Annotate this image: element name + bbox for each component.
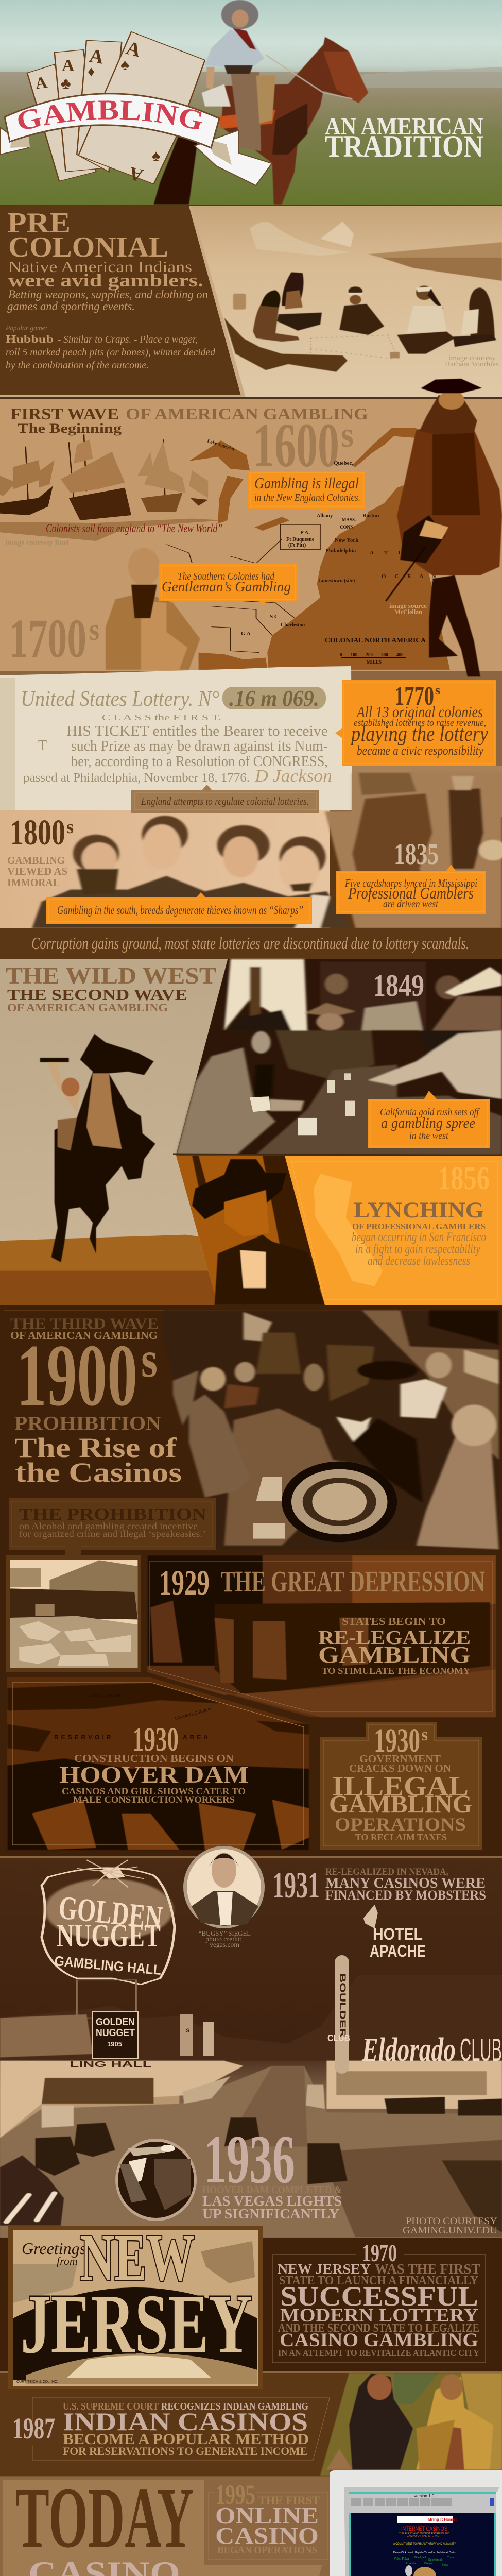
text: native americans: Hubbub <box>6 333 54 345</box>
box: 1930s illegal gambling: TO RECLAIM TAXES <box>355 1832 447 1842</box>
panel: third wave <box>0 1305 502 1856</box>
callout: 1770s lotteries: established lotteries to raise revenue, <box>354 718 486 728</box>
panel: lottery ticket: D Jackson <box>254 767 332 786</box>
photo: crt monitor showing internet casino: CASINO ON THE INTERNET! <box>407 2535 441 2538</box>
map labels: Charleston <box>281 622 305 628</box>
panel: great depression: GAMBLING <box>318 1641 471 1668</box>
box: the prohibition: on Alcohol and gambling created incentive <box>19 1521 198 1531</box>
photo: greetings from new jersey postcard: Greetings <box>22 2239 86 2258</box>
neon signs: APACHE <box>370 1942 426 1960</box>
neon signs: Eldorado <box>361 2031 456 2069</box>
box: 1930s illegal gambling: s <box>421 1725 428 1744</box>
callout: gambling illegal: Gambling is illegal <box>254 474 359 492</box>
neon signs: BOULDER <box>338 1973 348 2038</box>
photo: crt monitor showing internet casino: Blackjack <box>414 2556 427 2560</box>
photo: crt monitor showing internet casino: Video Poker <box>394 2557 409 2561</box>
text: gambling viewed as immoral: GAMBLING <box>7 854 65 867</box>
panel: lottery ticket: T <box>38 738 47 754</box>
panel: hoover dam: HOOVER DAM <box>59 1761 249 1788</box>
photo: crt monitor showing internet casino: Bingo <box>424 2562 432 2565</box>
image credit: image source <box>389 602 427 609</box>
heading: wild west: THE WILD WEST <box>6 963 216 989</box>
callout: sharps: Gambling in the south, breeds degenerate thieves known as “Sharps” <box>57 904 303 917</box>
caption: bugsy siegel <box>199 1930 251 1949</box>
photo: crt monitor showing internet casino: Bring it Home! <box>428 2517 457 2522</box>
text: native americans: were avid gamblers. <box>8 270 203 291</box>
year: 1700s: s <box>89 613 99 647</box>
map labels: Boston <box>362 513 379 519</box>
box: 1930s illegal gambling: GOVERNMENT <box>359 1753 441 1765</box>
box: 1930s illegal gambling: 1930 <box>374 1722 420 1759</box>
heading: wild west <box>6 963 216 1014</box>
heading: first wave: OF AMERICAN GAMBLING <box>126 404 368 423</box>
map labels: P A. <box>300 530 310 536</box>
map labels: Quebec, <box>334 460 353 466</box>
heading: first wave <box>10 404 368 436</box>
photo: rearing horse and rider <box>0 1034 218 1305</box>
panel: lottery ticket: United States Lottery. N° <box>21 687 219 711</box>
panel: 1856 lynching: LYNCHING <box>354 1198 484 1223</box>
panel: hoover dam: MALE CONSTRUCTION WORKERS <box>73 1794 235 1805</box>
title: an american tradition: TRADITION <box>325 129 483 163</box>
map: colonial north america <box>166 428 450 670</box>
panel: las vegas <box>0 1846 502 2238</box>
panel: hoover dam: CONSTRUCTION BEGINS ON <box>74 1752 234 1765</box>
photo: crt monitor showing internet casino: THE FIRST AND OLDEST ESTABLISHED <box>399 2532 449 2535</box>
image credit: Barbara Voorhies <box>445 361 499 368</box>
ribbon banner with title <box>0 93 273 187</box>
panel: lottery ticket: passed at Philadelphia, November 18, 1776. <box>23 771 250 785</box>
panel: 1987 background <box>0 2371 502 2477</box>
callout: gambling illegal: in the New England Colonies. <box>254 492 360 503</box>
photo: bread line <box>147 1555 496 1717</box>
divider <box>0 205 502 206</box>
box: 1995 online casino: ONLINE <box>215 2502 319 2529</box>
heading: pre colonial <box>7 207 168 263</box>
panel: hero: A <box>88 45 105 69</box>
map labels <box>206 438 440 665</box>
box: 1995 online casino <box>209 2479 327 2560</box>
text: gambling viewed as immoral: VIEWED AS <box>7 865 67 877</box>
panel: 1987 indian casinos: BECOME A POPULAR METHOD <box>63 2431 309 2448</box>
panel: today <box>0 2470 502 2576</box>
panel: lottery ticket: .16 m 069. <box>229 686 319 711</box>
text: gambling viewed as immoral <box>7 854 67 889</box>
map labels: G A <box>241 631 251 637</box>
year: 1835: 1835 <box>394 837 439 871</box>
sign: golden nugget: GAMBLING HALL <box>54 1953 162 1978</box>
box: 1930s illegal gambling <box>320 1722 482 1850</box>
callout: gentleman's gambling <box>159 563 298 606</box>
photo: native americans playing hubbub <box>224 222 502 372</box>
neon signs: 1905 <box>107 2040 122 2048</box>
photo: gunfight engraving <box>325 773 502 928</box>
panel: great depression: RE-LEGALIZE <box>318 1627 471 1649</box>
text: native americans: Popular game: <box>5 325 47 332</box>
caption: bugsy siegel: photo credit: <box>205 1936 242 1943</box>
panel: 1970 new jersey: IN AN ATTEMPT TO REVITALIZE ATLANTIC CITY <box>278 2348 479 2358</box>
photo: man in colonial coat <box>386 379 502 676</box>
panel: 1970 new jersey: CASINO GAMBLING <box>280 2330 478 2351</box>
text: 1931 <box>272 1865 486 1906</box>
heading: pre colonial: PRE <box>7 207 71 239</box>
heading: first wave: FIRST WAVE <box>10 404 119 423</box>
text: 1936: LAS VEGAS LIGHTS <box>202 2193 342 2209</box>
photo: crt monitor showing internet casino: Slots <box>442 2564 448 2567</box>
map labels: New York <box>335 537 359 544</box>
callout: gold rush <box>368 1091 490 1148</box>
panel: pre colonial <box>0 206 502 399</box>
panel: hero: A <box>127 163 145 186</box>
panel: 1987 indian casinos <box>12 2373 502 2476</box>
text: native americans <box>5 258 216 371</box>
photo: greetings from new jersey postcard: JERSEY <box>21 2277 252 2371</box>
text: 1931: FINANCED BY MOBSTERS <box>325 1888 486 1903</box>
neon signs: LING HALL <box>70 2060 152 2069</box>
callout: professional gamblers: Professional Gamblers <box>348 884 474 902</box>
callout: 1770s lotteries: s <box>435 683 440 698</box>
panel: hero: ♠ <box>120 55 129 74</box>
box: the prohibition: THE PROHIBITION <box>19 1505 207 1524</box>
panel: 1970 new jersey: STATE TO LAUNCH A FINANCIALLY <box>279 2274 478 2287</box>
banner: corruption <box>0 928 502 959</box>
image credit: PHOTO COURTESY <box>406 2216 497 2227</box>
photo: crt monitor showing internet casino: INTERNET CASINOS <box>401 2525 447 2532</box>
title: an american tradition: AN AMERICAN <box>325 113 483 140</box>
map labels: S C <box>270 614 279 620</box>
photo: hoover dam oval <box>115 2139 197 2221</box>
image credit: image courtesy <box>448 354 496 362</box>
neon signs: S <box>186 2028 189 2034</box>
panel: great depression: TO STIMULATE THE ECONOMY <box>322 1666 470 1676</box>
panel: 1856 lynching: and decrease lawlessness <box>368 1254 470 1268</box>
panel: lottery ticket: such Prize as may be drawn against its Num- <box>71 738 328 754</box>
panel: hero: A <box>62 56 75 75</box>
year: 1600s: 1600 <box>253 411 339 480</box>
panel: hoover dam: COLORADO RIVER <box>174 1707 212 1721</box>
neon signs: GOLDEN <box>96 2016 135 2028</box>
icon: california map <box>314 1174 383 1286</box>
photo: crt monitor showing internet casino: Sportsbook <box>428 2558 442 2562</box>
caption: bugsy siegel: “BUGSY” SIEGEL <box>199 1930 251 1938</box>
image credit: GAMING.UNIV.EDU <box>403 2225 497 2236</box>
callout: 1770s lotteries: became a civic responsibility <box>357 744 484 758</box>
neon signs: CLUB <box>327 2033 350 2043</box>
callout: gambling illegal <box>248 471 366 514</box>
callout: gold rush: California gold rush sets off <box>380 1107 480 1118</box>
box: 1995 online casino: 1995 <box>215 2479 255 2510</box>
year: 1800s: 1800 <box>10 813 65 853</box>
panel: 1970 new jersey <box>0 2237 502 2371</box>
panel: 1970 new jersey: MODERN LOTTERY <box>280 2305 478 2326</box>
panel: 1987 indian casinos: FOR RESERVATIONS TO GENERATE INCOME <box>63 2445 307 2458</box>
panel: 1856 lynching <box>285 1156 502 1305</box>
panel: 1987 indian casinos: RECOGNIZES INDIAN GAMBLING <box>161 2401 308 2412</box>
panel: 1970 new jersey: AND THE SECOND STATE TO LEGALIZE <box>278 2321 479 2334</box>
panel: hoover dam: AREA <box>183 1734 211 1741</box>
box: 1930s illegal gambling: GAMBLING <box>329 1789 472 1818</box>
caption: bugsy siegel: vegas.com <box>210 1941 239 1949</box>
heading: pre colonial: COLONIAL <box>8 231 168 263</box>
text: native americans: Betting weapons, supplies, and clothing on <box>8 288 208 301</box>
box: the prohibition: for organized crime and illegal ‘speakeasies.’ <box>19 1529 206 1539</box>
photo: crt monitor showing internet casino: Craps <box>447 2556 455 2560</box>
text: native americans: by the combination of the outcome. <box>6 360 149 371</box>
photo: roulette table <box>164 1310 499 1549</box>
photo: greetings from new jersey postcard: from <box>57 2255 78 2267</box>
neon signs: NUGGET <box>96 2027 135 2039</box>
text: 1931: MANY CASINOS WERE <box>325 1875 486 1891</box>
callout: gold rush: a gambling spree <box>381 1115 475 1131</box>
panel: 1987 indian casinos: 1987 <box>12 2412 55 2445</box>
panel: hero: ♠ <box>152 147 160 164</box>
image credit <box>445 354 499 368</box>
panel: hoover dam: GRAND CANYON <box>89 1693 123 1698</box>
callout: sharps <box>46 892 312 924</box>
photo: greetings from new jersey postcard <box>8 2221 263 2389</box>
panel: 1970 new jersey: 1970 <box>362 2240 397 2267</box>
text: 1931: 1931 <box>272 1865 320 1906</box>
year: 1600s: s <box>341 415 354 455</box>
panel: 1987 indian casinos: U.S. SUPREME COURT <box>63 2401 159 2412</box>
heading: wild west: OF AMERICAN GAMBLING <box>7 1001 168 1014</box>
image credit <box>389 602 427 616</box>
year: 1800s: s <box>66 817 74 837</box>
callout: england attempts: England attempts to regulate colonial lotteries. <box>141 795 309 807</box>
text: native americans: games and sporting events. <box>7 300 135 313</box>
callout: professional gamblers <box>336 865 486 914</box>
photo: gambling hall <box>176 959 502 1155</box>
panel: hero: A <box>34 73 48 93</box>
text: native americans: - Similar to Craps. - Place a wager, <box>58 334 198 345</box>
panel: hero: ♦ <box>88 64 95 80</box>
panel: lottery ticket <box>0 666 502 817</box>
panel: 1970 new jersey: SUCCESSFUL <box>280 2281 478 2312</box>
icon: four aces playing cards <box>27 32 205 184</box>
panel: lottery ticket: HIS TICKET entitles the Bearer to receive <box>66 723 328 739</box>
callout: gentleman's gambling: The Southern Colonies had <box>178 571 275 582</box>
box: 1930s illegal gambling: CRACKS DOWN ON <box>349 1762 451 1774</box>
panel: hoover dam <box>7 1677 309 1850</box>
map labels: Lake Superior <box>206 438 236 452</box>
map labels: Jamestown (site) <box>318 578 355 584</box>
heading: third wave: 1900 <box>16 1327 137 1425</box>
panel: great depression: 1929 <box>159 1563 210 1602</box>
photo: crt monitor showing internet casino: A COMMITMENT TO PHILANTHROPY AND HUMANITY. <box>393 2543 456 2546</box>
text frame: 1970 <box>272 2255 486 2363</box>
heading: third wave: s <box>141 1331 158 1388</box>
neon signs: HOTEL <box>373 1925 423 1943</box>
callout: gentleman's gambling: Gentleman’s Gambling <box>162 579 291 595</box>
text: 1936: 1936 <box>204 2121 295 2197</box>
box: the prohibition <box>9 1498 216 1550</box>
text: 1936: UP SIGNIFICANTLY <box>202 2206 339 2222</box>
text: gambling viewed as immoral: IMMORAL <box>7 876 60 889</box>
photo: crt monitor showing internet casino: version 1.0 <box>414 2494 435 2498</box>
ribbon banner with title: GAMBLING <box>19 101 202 129</box>
panel: hoover dam: CASINOS AND GIRL SHOWS CATER TO <box>62 1786 246 1797</box>
map labels: Philadelphia <box>325 548 356 554</box>
heading: today: TODAY <box>15 2470 194 2566</box>
photo: greetings from new jersey postcard: CURT TEICH & CO., INC. <box>16 2380 58 2384</box>
heading: third wave: OF AMERICAN GAMBLING <box>10 1329 158 1342</box>
image credit: image courtesy Buel <box>6 539 69 547</box>
panel: 1800s <box>0 773 502 928</box>
box: 1995 online casino: CASINO <box>215 2522 319 2549</box>
image credit: McClellan <box>394 608 423 616</box>
photo: crt monitor showing internet casino: Roulette <box>406 2562 417 2565</box>
callout: professional gamblers: are driven west <box>383 899 438 910</box>
photo: downtown las vegas street <box>0 1975 502 2238</box>
map labels: 0 100 200 300 400 <box>340 652 404 657</box>
illustration: ships <box>0 434 224 541</box>
caption: colonists sail: Colonists sail from england to “The New World” <box>46 522 222 535</box>
panel: lottery ticket: ber, according to a Resolution of CONGRESS, <box>71 754 328 770</box>
photo: crt monitor showing internet casino: Please Click Here to Register Yourself on the Internet Casino <box>393 2551 456 2554</box>
map labels: A T L <box>370 550 407 556</box>
map labels: (Ft Pitt) <box>288 543 306 548</box>
heading: first wave: The Beginning <box>18 421 122 436</box>
box: 1995 online casino: THE FIRST <box>258 2494 320 2507</box>
photo: barrels of alcohol <box>6 1555 141 1672</box>
photo: four men portrait <box>32 816 352 928</box>
panel: 1987 indian casinos: INDIAN CASINOS <box>63 2407 308 2436</box>
photo: man at slot machine statue <box>320 2373 502 2476</box>
panel: hoover dam: 1930 <box>132 1721 179 1758</box>
map labels: O C E A N <box>382 573 440 580</box>
text: native americans: Native American Indians <box>8 258 192 276</box>
heading: third wave <box>10 1315 182 1488</box>
panel: 1856 lynching: OF PROFESSIONAL GAMBLERS <box>352 1222 486 1231</box>
photo: greetings from new jersey postcard: NEW <box>80 2221 195 2294</box>
text: native americans: roll 5 marked peach pits (or bones), winner decided <box>6 347 216 358</box>
panel: hero <box>0 0 502 205</box>
box: 1930s illegal gambling: ILLEGAL <box>332 1771 469 1802</box>
panel: 1970 new jersey: WAS THE FIRST <box>375 2261 480 2277</box>
map labels: MILES <box>367 659 382 665</box>
neon signs <box>70 1905 502 2074</box>
heading: third wave: The Rise of <box>14 1432 177 1463</box>
portrait: bugsy siegel <box>183 1846 265 1928</box>
panel: first wave background <box>0 397 502 671</box>
callout: gold rush: in the west <box>409 1130 449 1141</box>
panel: great depression <box>147 1555 496 1717</box>
heading: third wave: PROHIBITION <box>14 1413 161 1434</box>
box: 1930s illegal gambling: OPERATIONS <box>335 1814 466 1835</box>
year: 1849: 1849 <box>373 969 424 1003</box>
map labels: CONN <box>340 524 354 530</box>
map labels: COLONIAL NORTH AMERICA <box>325 637 426 645</box>
sign: golden nugget: GOLDEN <box>57 1889 164 1936</box>
photo: gunslinger portrait <box>176 1156 325 1305</box>
panel: 1970 new jersey: NEW JERSEY <box>278 2261 371 2277</box>
heading: third wave: THE THIRD WAVE <box>10 1315 159 1332</box>
panel: hero: A <box>124 37 143 62</box>
map labels: Ft Duquesne <box>286 537 315 543</box>
panel: lottery ticket: C L A S S the F I R S T. <box>102 713 221 722</box>
heading: third wave: the Casinos <box>15 1457 182 1488</box>
map labels: MASS. <box>342 517 356 522</box>
photo: crt monitor showing internet casino <box>330 2470 502 2576</box>
panel: hoover dam: RESERVOIR <box>54 1734 113 1741</box>
callout: 1770s lotteries: 1770 <box>394 682 434 711</box>
sign: golden nugget: NUGGET <box>57 1917 161 1954</box>
heading: wild west: THE SECOND WAVE <box>7 986 187 1004</box>
panel: great depression: STATES BEGIN TO <box>342 1615 446 1628</box>
text: 1931: RE-LEGALIZED IN NEVADA, <box>325 1867 448 1877</box>
map: reservoir area relief <box>7 1683 309 1850</box>
panel: wild west <box>0 959 502 1305</box>
panel: hero: ♣ <box>61 75 71 92</box>
map labels: Albany <box>317 513 333 519</box>
sign: golden nugget <box>42 1860 175 2018</box>
callout: 1770s lotteries <box>335 680 496 766</box>
photo: cowboy on horse <box>154 0 368 205</box>
panel: 1856 lynching: 1856 <box>438 1160 490 1196</box>
year: 1700s: 1700 <box>9 608 86 669</box>
text: 1936: HOOVER DAM COMPLETED & <box>202 2183 342 2196</box>
callout: england attempts <box>131 785 319 813</box>
title: an american tradition <box>325 113 483 163</box>
photo: colonial woman from behind <box>106 548 200 670</box>
box: 1995 online casino: BEGAN OPERATIONS <box>217 2545 317 2556</box>
image credit <box>403 2216 497 2236</box>
